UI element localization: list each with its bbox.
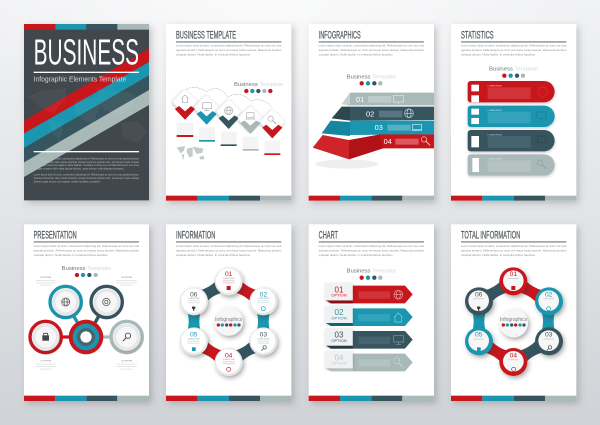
level 2: 02 — [366, 109, 374, 118]
intro text: Lorem ipsum dolor sit amet, consectetur adipiscing elit. Pellentesque ac nunc nec erat — [461, 44, 567, 48]
level 4: 04 — [384, 137, 392, 146]
node 01 — [499, 267, 527, 295]
node 04 — [215, 348, 243, 376]
intro text: volutpat dictum. Nulla facilisi. In vehicula finibus faucibus — [176, 53, 251, 57]
node: globe — [50, 286, 81, 318]
node: magnifier — [111, 321, 142, 353]
bar 4: LOREM IPSUM — [488, 159, 502, 161]
node 03: 03 — [545, 332, 553, 339]
intro text: Lorem ipsum dolor sit amet, consectetur adipiscing elit. Pellentesque ac nunc nec erat — [176, 44, 282, 48]
panel: infographics — [309, 24, 434, 201]
node: target — [91, 286, 122, 318]
small world map — [177, 146, 204, 161]
node 04: LOREM IPSUM — [223, 359, 235, 361]
colour dots — [502, 74, 525, 78]
intro text: egestas pretium. Pellentesque ac nunc vel neque luctus laoreet. Maecenas pretium — [319, 48, 425, 52]
colour dots — [360, 276, 382, 280]
cover body text — [34, 157, 140, 184]
intro text: Lorem ipsum dolor sit amet, consectetur adipiscing elit. Pellentesque ac nunc nec erat — [319, 44, 424, 48]
bar 3 — [468, 130, 555, 151]
node 03: 03 — [260, 332, 267, 339]
node 02: 02 — [545, 291, 553, 298]
step 2 — [193, 94, 220, 142]
heading: PRESENTATION — [34, 230, 77, 242]
intro text: egestas pretium. Pellentesque ac nunc vel neque luctus laoreet. Maecenas pretium — [176, 48, 282, 52]
cover title: BUSINESS — [34, 32, 139, 73]
node 01: 01 — [225, 271, 233, 278]
panel: statistics — [451, 24, 576, 201]
intro text: Lorem ipsum dolor sit amet, consectetur adipiscing elit. Pellentesque ac nunc nec erat — [461, 244, 567, 248]
cover body text: Donec eget lectus vel sapien mattis facilisis curabitur — [34, 180, 100, 184]
intro text: Lorem ipsum dolor sit amet, consectetur adipiscing elit. Pellentesque ac nunc nec erat — [34, 244, 139, 248]
panel: business template — [166, 24, 291, 201]
intro text — [319, 244, 425, 257]
node 02 — [535, 287, 563, 315]
dotted world map — [27, 88, 147, 143]
option 02 — [325, 305, 413, 326]
node 04: 04 — [225, 352, 233, 359]
bar 1: LOREM IPSUM — [488, 86, 502, 88]
intro text: volutpat dictum. Nulla facilisi. In vehicula finibus faucibus — [461, 53, 536, 57]
node 05: 05 — [190, 332, 198, 339]
footer colour bar — [166, 396, 291, 401]
option 02: OPTION — [331, 315, 347, 320]
business template label: Business Template — [62, 266, 111, 272]
option labels: 01 OPTION — [40, 361, 51, 363]
intro text: Lorem ipsum dolor sit amet, consectetur adipiscing elit. Pellentesque ac nunc nec erat — [176, 244, 282, 248]
node 06: 06 — [190, 291, 198, 298]
footer colour bar — [166, 196, 291, 201]
heading: INFORMATION — [176, 230, 215, 242]
node 02: 02 — [260, 291, 267, 298]
cover body text: Vivamus fermentum vitae mauris at lacinia. Aenean maximus pulvinar enim, sed semper turpis volutpat — [34, 176, 139, 180]
node 02 — [249, 287, 277, 315]
centre hub — [214, 307, 243, 336]
node 05: 05 — [475, 332, 483, 339]
colour dots — [244, 89, 272, 93]
dashed connector — [176, 87, 272, 107]
option labels: 04 OPTION — [121, 277, 132, 279]
node 03: LOREM IPSUM — [258, 338, 270, 340]
node 04: 04 — [510, 352, 517, 359]
intro text: egestas pretium. Pellentesque ac nunc vel neque luctus laoreet. Maecenas pretium — [461, 248, 567, 252]
business template label: Business Template — [347, 268, 396, 274]
option 02: 02 — [335, 308, 344, 317]
footer colour bar — [309, 196, 434, 201]
level 3: 03 — [375, 123, 383, 132]
bar 2 — [468, 106, 555, 127]
panel: total information — [451, 224, 576, 401]
panel: information — [166, 224, 291, 401]
footer colour bar — [451, 396, 576, 401]
heading: INFOGRAPHICS — [319, 29, 361, 41]
colour dots — [360, 81, 382, 86]
cover body text: Donec eget lectus vel sapien mattis facilisis. Curabitur a tortor nec orci blandit tempor at a risus — [34, 163, 140, 167]
intro text — [176, 44, 282, 57]
panel: presentation — [24, 224, 149, 401]
node 02: LOREM IPSUM — [258, 298, 270, 300]
node 01: LOREM IPSUM — [223, 278, 235, 280]
option 03: 03 — [335, 331, 344, 340]
node 01 — [215, 267, 243, 295]
option 03 — [325, 328, 413, 349]
centre hub: Infographics — [215, 317, 243, 323]
node 06 — [465, 287, 493, 315]
node 05 — [180, 327, 208, 355]
business template label: Business Template — [347, 74, 396, 80]
intro text: volutpat dictum. Nulla facilisi. In vehicula finibus faucibus — [461, 253, 536, 257]
option labels: 02 OPTION — [121, 361, 132, 363]
intro text — [461, 244, 567, 257]
intro text — [34, 244, 140, 257]
bar 3: LOREM IPSUM — [488, 134, 502, 136]
option labels: 03 OPTION — [40, 277, 51, 279]
panel: business cover — [24, 24, 149, 200]
heading: TOTAL INFORMATION — [461, 230, 520, 242]
cover body text: Lorem ipsum dolor sit amet, consectetur adipiscing elit. Pellentesque ac nunc nec erat egestas pretium — [34, 172, 140, 176]
intro text: egestas pretium. Pellentesque ac nunc vel neque luctus laoreet. Maecenas pretium — [34, 248, 140, 252]
option 01: 01 — [335, 285, 344, 294]
heading: CHART — [319, 230, 338, 242]
intro text — [461, 44, 567, 57]
business template label: Business Template — [489, 66, 538, 72]
node 05: LOREM IPSUM — [188, 338, 200, 340]
node 06: 06 — [475, 291, 483, 298]
step 3 — [215, 98, 242, 146]
ring connectors — [468, 272, 559, 371]
step 4 — [237, 105, 264, 151]
node 06: LOREM IPSUM — [188, 298, 200, 300]
cover body text: Lorem ipsum dolor sit amet, consectetur adipiscing elit. Pellentesque ac nunc nec erat egestas pretium — [34, 157, 140, 161]
intro text — [176, 244, 282, 257]
intro text: egestas pretium. Pellentesque ac nunc vel neque luctus laoreet. Maecenas pretium — [176, 248, 282, 252]
node: bag — [30, 321, 61, 353]
centre hub — [499, 309, 528, 337]
node 03 — [249, 327, 277, 355]
ring connectors — [183, 272, 274, 371]
option 01 — [325, 283, 413, 303]
pyramid — [313, 93, 434, 169]
option 03: OPTION — [331, 338, 347, 343]
heading: STATISTICS — [461, 29, 494, 41]
diagonal stripes — [24, 48, 149, 177]
step 5 — [259, 108, 286, 155]
intro text: volutpat dictum. Nulla facilisi. In vehicula finibus faucibus — [319, 253, 393, 257]
cover colour bar — [24, 24, 149, 30]
node 06 — [180, 287, 208, 315]
option labels — [36, 277, 137, 370]
cover body text: Vivamus fermentum vitae mauris at lacinia. Aenean maximus pulvinar enim, sed semper turpis volutpat — [34, 160, 139, 164]
cover subtitle: Infographic Elements Template — [34, 77, 126, 84]
intro text: egestas pretium. Pellentesque ac nunc vel neque luctus laoreet. Maecenas pretium — [461, 48, 567, 52]
footer colour bar — [309, 396, 434, 401]
bar 4 — [468, 154, 555, 176]
pyramid shadow — [315, 159, 378, 169]
node 04 — [499, 348, 527, 376]
option 04: 04 — [335, 353, 344, 362]
level 1: 01 — [356, 95, 364, 104]
bar 2: LOREM IPSUM — [488, 110, 502, 112]
step 1 — [172, 88, 198, 137]
node: centre — [69, 320, 103, 354]
intro text — [319, 44, 425, 57]
panel: chart — [309, 224, 434, 401]
node 03 — [535, 327, 563, 355]
intro text: Lorem ipsum dolor sit amet, consectetur adipiscing elit. Pellentesque ac nunc nec erat — [319, 244, 424, 248]
bar 1 — [468, 81, 555, 102]
footer colour bar — [24, 396, 149, 401]
connector lines — [46, 302, 127, 337]
intro text: egestas pretium. Pellentesque ac nunc vel neque luctus laoreet. Maecenas pretium — [319, 248, 425, 252]
footer colour bar — [451, 196, 576, 201]
business template label: Business Template — [234, 82, 283, 88]
option 01: OPTION — [331, 293, 347, 298]
centre hub: Infographics — [500, 317, 528, 323]
option 04: OPTION — [331, 361, 347, 366]
colour dots — [75, 273, 98, 277]
node 05 — [465, 327, 493, 355]
intro text: volutpat dictum. Nulla facilisi. In vehicula finibus faucibus — [34, 253, 108, 257]
node 01: 01 — [510, 271, 517, 278]
intro text: volutpat dictum. Nulla facilisi. In vehicula finibus faucibus — [319, 53, 393, 57]
option 04 — [325, 351, 413, 371]
heading: BUSINESS TEMPLATE — [176, 29, 236, 41]
cover body text: Integer ornare nibh vitae ligula dictum, quis rutrum velit aliquam tempus — [34, 166, 124, 170]
intro text: volutpat dictum. Nulla facilisi. In vehicula finibus faucibus — [176, 253, 251, 257]
